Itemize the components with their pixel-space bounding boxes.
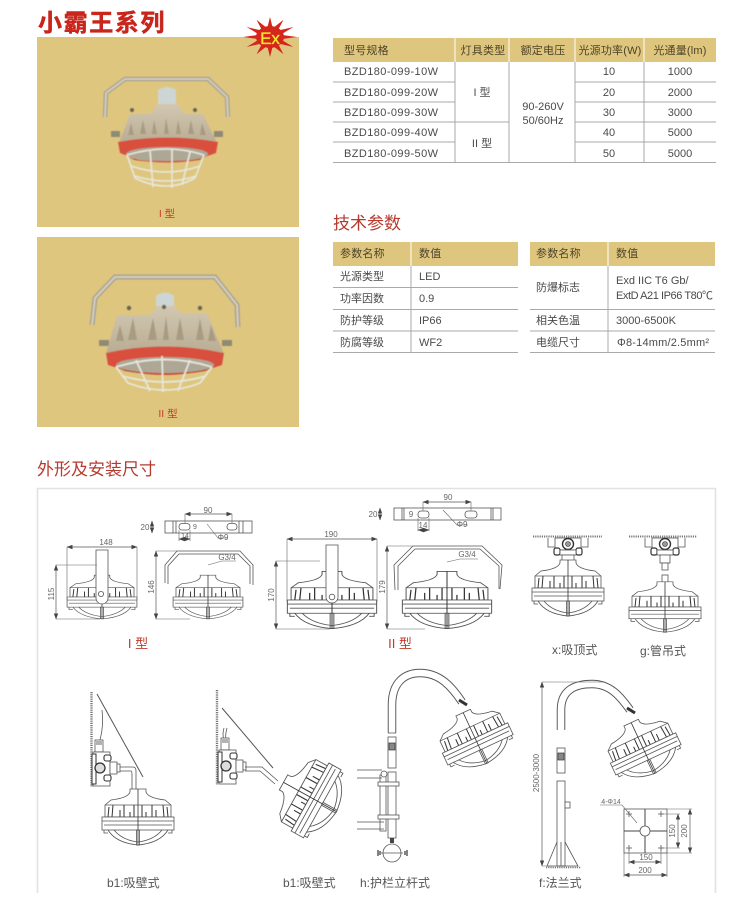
rated voltage: 50/60Hz [523,115,563,127]
drawing: flange base plate dimensions: 150 [639,853,653,862]
drawing: type I bracket plate: 90 [204,506,213,515]
drawing: type I bracket plate [141,506,252,542]
power values: 30 [603,107,615,119]
table: technical parameters left: 防护等级 [340,313,384,327]
drawing: ceiling mounted lamp [532,536,604,616]
table: technical parameters right: ExtD A21 IP66 T80℃ [616,290,713,302]
drawing: type I front view [47,538,137,619]
title: 小霸王系列 [38,10,166,37]
drawing: type I bracket plate: Φ9 [218,533,229,542]
drawing: type II side view [378,546,502,629]
drawing: type I side view: G3/4 [218,553,236,562]
drawing: type II side view: 179 [378,580,387,594]
drawing: flange base plate dimensions: 4-Φ14 [601,799,621,806]
drawing: type I bracket plate: 14 [181,533,189,540]
table header row [344,43,707,57]
luminous flux values: 1000 [668,66,692,78]
label: type II drawings: II 型 [388,636,412,651]
label: flange mount: f:法兰式 [539,876,582,890]
model names: BZD180-099-50W [344,148,439,160]
table: technical parameters left [333,242,518,352]
label: guardrail pole mount: h:护栏立杆式 [360,875,430,890]
panel: dimension drawings frame [38,488,716,893]
table header row: 额定电压 [521,43,565,57]
panel: type I product photo [37,37,299,227]
power values [603,66,615,160]
table header row: 型号规格 [344,43,389,57]
table header row: 灯具类型 [461,43,505,57]
drawing: flange base plate dimensions: 200 [638,866,652,875]
power values: 10 [603,66,615,78]
table: technical parameters right: 参数名称 [536,246,581,260]
drawing: guardrail pole mount [357,673,519,862]
rated voltage: 90-260V [522,101,564,113]
drawing: type I bracket plate: 20 [141,523,150,532]
drawing: type I side view [147,551,253,619]
drawing: flange base plate dimensions [600,799,692,877]
drawing: type II bracket plate: 14 [419,521,428,530]
table: technical parameters left: 防腐等级 [340,335,384,349]
label: ceiling mount: x:吸顶式 [552,643,597,657]
luminous flux values: 2000 [668,87,692,99]
rated voltage [522,101,564,127]
drawing: type II side view: G3/4 [458,550,476,559]
lamp types: I 型 [473,85,491,99]
power values: 50 [603,148,615,160]
label: type I: I 型 [159,207,175,220]
label: wall mount left: b1:吸壁式 [107,875,160,890]
label: type II: II 型 [158,407,178,420]
drawing: type II bracket plate: 9 [409,510,414,519]
table: technical parameters left: 功率因数 [340,291,384,305]
heading: outline and installation dimensions: 外形及安装尺寸 [37,460,156,479]
drawing: flange pole mount: 2500-3000 [532,753,541,792]
luminous flux values: 5000 [668,127,692,139]
drawing: type I front view: 115 [47,587,56,600]
luminous flux values: 3000 [668,107,692,119]
table: technical parameters left: IP66 [419,315,442,327]
table: technical parameters right: 电缆尺寸 [536,335,580,349]
model names: BZD180-099-40W [344,127,439,139]
drawing: type II bracket plate [369,493,501,531]
table: technical parameters right: 3000-6500K [616,315,677,327]
model names: BZD180-099-10W [344,66,439,78]
label: type I drawings: I 型 [128,636,148,651]
table: technical parameters left: 0.9 [419,293,434,305]
luminous flux values: 5000 [668,148,692,160]
panel: type II product photo [37,237,299,427]
photo: type I lamp [105,79,228,188]
table: technical parameters left: WF2 [419,337,442,349]
icon: Ex explosion-proof star: Ex [260,29,280,48]
drawing: pipe pendant lamp [629,536,701,632]
drawing: type I side view: 146 [147,580,156,594]
luminous flux values [668,66,692,160]
drawing: flange base plate dimensions: 150 [668,824,677,838]
drawing: flange base plate dimensions: 200 [680,824,689,838]
drawing: type II front view: 190 [324,530,338,539]
drawing: wall mount, lamp angled [217,690,355,846]
drawing: type II bracket plate: 20 [369,510,378,519]
drawing: type I bracket plate: 9 [193,524,197,531]
power values: 40 [603,127,615,139]
icon: Ex explosion-proof star [243,17,297,57]
table: technical parameters right: Exd IIC T6 Gb/ [616,275,689,287]
drawing: wall mount, lamp hanging [92,692,174,845]
table: technical parameters right [530,242,715,352]
lamp types [472,85,492,150]
table header row: 光通量(lm) [653,43,707,57]
lamp types: II 型 [472,136,492,150]
table: technical parameters left: LED [419,271,440,283]
table: technical parameters right: 防爆标志 [536,280,580,294]
table: model specifications [333,38,716,162]
model names: BZD180-099-20W [344,87,439,99]
power values: 20 [603,87,615,99]
drawing: type II front view [267,530,377,629]
table header row: 光源功率(W) [578,43,642,57]
table: technical parameters left: 光源类型 [340,269,384,283]
drawing: type II front view: 170 [267,588,276,602]
heading: technical parameters: 技术参数 [333,214,401,233]
table: technical parameters left: 参数名称 [340,246,385,260]
label: pipe pendant mount: g:管吊式 [640,643,686,658]
table: technical parameters left: 数值 [419,247,441,260]
drawing: flange pole mount [532,682,687,868]
model names: BZD180-099-30W [344,107,439,119]
photo: type II lamp [92,277,238,392]
drawing: type II bracket plate: Φ9 [457,520,468,529]
table: technical parameters right: 相关色温 [536,313,580,327]
table: technical parameters right: 数值 [616,247,638,260]
table: technical parameters right: Φ8-14mm/2.5mm² [617,337,709,349]
label: wall mount right: b1:吸壁式 [283,875,336,890]
drawing: type I front view: 148 [99,538,113,547]
model names [344,66,439,160]
drawing: type II bracket plate: 90 [444,493,453,502]
